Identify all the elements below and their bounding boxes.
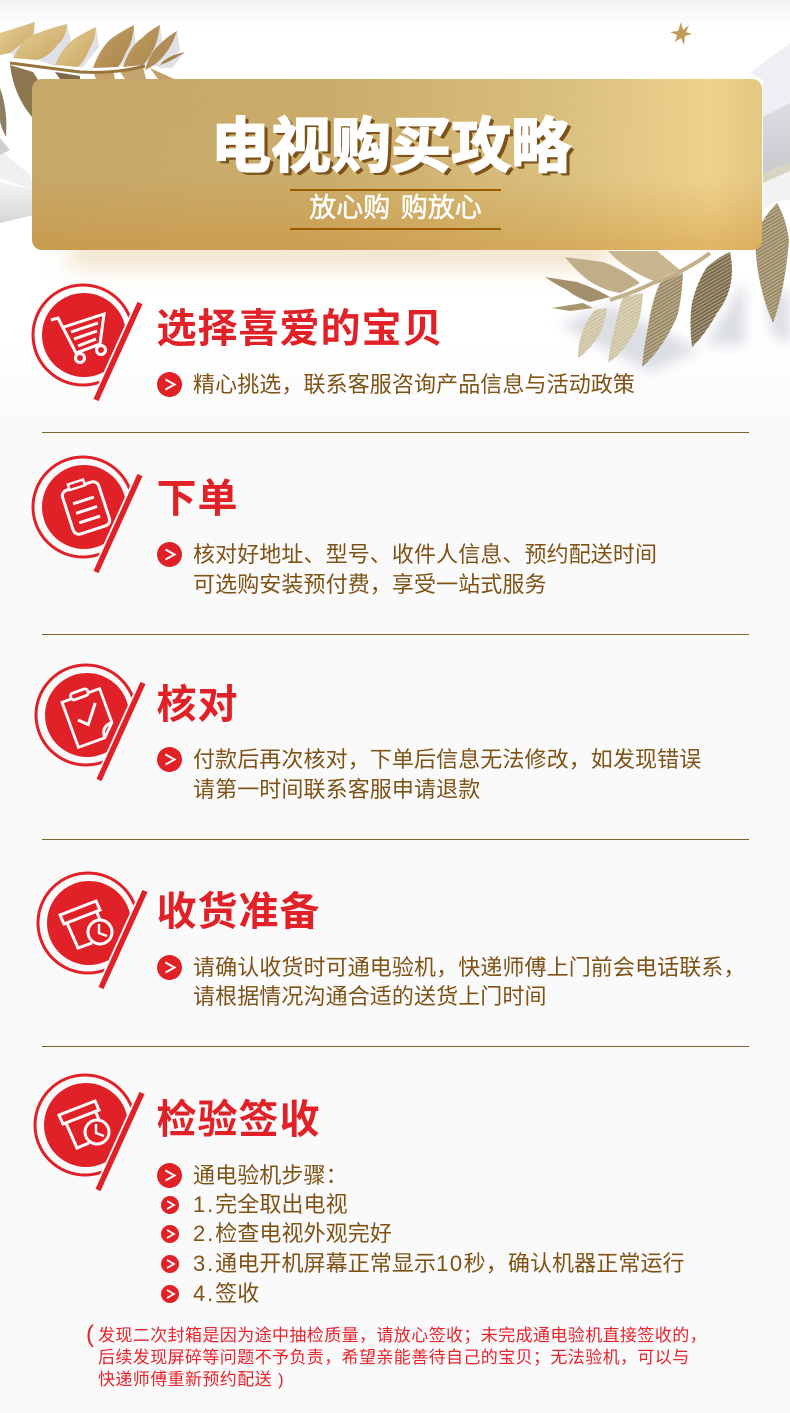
small bullet 2: [161, 1225, 179, 1243]
soft leaf shadows: [560, 280, 790, 372]
list item 4: 4.签收: [193, 1281, 259, 1306]
description: 付款后再次核对，下单后信息无法修改，如发现错误: [193, 747, 701, 772]
description line 2: 请根据情况沟通合适的送货上门时间: [193, 984, 547, 1009]
icon: box with clock: [34, 1074, 144, 1192]
description: 精心挑选，联系客服咨询产品信息与活动政策: [193, 372, 635, 397]
icon: box with clock: [36, 872, 148, 990]
gold star: [670, 22, 692, 45]
note line 3: 快递师傅重新预约配送 ): [98, 1370, 284, 1389]
gold leaves, top-left: [0, 22, 35, 55]
list item 1: 1.完全取出电视: [193, 1192, 348, 1217]
step 2: order: [32, 456, 657, 597]
list item 2: 2.检查电视外观完好: [193, 1221, 392, 1246]
header banner: [32, 79, 762, 250]
bullet: [157, 542, 182, 567]
step 1: choose: [32, 284, 635, 402]
note: [86, 1321, 707, 1389]
title: 电视购买攻略: [211, 113, 571, 180]
under-stem leaves, left: [10, 65, 38, 117]
banner grain: [32, 79, 762, 250]
subtitle with rules: [290, 189, 501, 230]
bullet: [157, 955, 182, 980]
note line 1: 发现二次封箱是因为途中抽检质量，请放心签收；未完成通电验机直接签收的，: [98, 1326, 707, 1345]
heading: 核对: [156, 683, 238, 727]
bullet: [157, 1163, 182, 1188]
icon: shopping cart: [32, 284, 142, 402]
opening parenthesis: (: [86, 1321, 94, 1348]
paper shapes, left: [0, 150, 34, 190]
heading: 选择喜爱的宝贝: [156, 307, 444, 351]
right leaf cluster: [608, 251, 680, 281]
warm glow under panel: [70, 240, 610, 266]
list item 3: 3.通电开机屏幕正常显示10秒，确认机器正常运行: [193, 1251, 685, 1276]
subtitle with rules: 放心购 购放心: [309, 193, 482, 223]
step 4: prepare for delivery: [36, 872, 746, 1009]
heading: 下单: [156, 477, 238, 521]
heading: 收货准备: [156, 890, 320, 934]
description: 核对好地址、型号、收件人信息、预约配送时间: [193, 542, 657, 567]
description line 2: 请第一时间联系客服申请退款: [193, 777, 480, 802]
paper shapes, right: [750, 43, 790, 117]
leaf shadows, left: [8, 22, 185, 68]
small bullet 1: [161, 1196, 179, 1214]
icon: clipboard check: [34, 664, 146, 782]
note line 2: 后续发现屏碎等问题不予负责，希望亲能善待自己的宝贝；无法验机，可以与: [98, 1348, 690, 1367]
description line 2: 可选购安装预付费，享受一站式服务: [193, 572, 547, 597]
icon: clipboard list: [32, 456, 142, 574]
heading: 检验签收: [156, 1098, 320, 1142]
small bullet 3: [161, 1255, 179, 1273]
decorative backdrop: paper leaves and star: [0, 22, 790, 374]
small bullet 4: [161, 1285, 179, 1303]
description: 通电验机步骤：: [193, 1163, 348, 1188]
bullet: [157, 747, 182, 772]
description: 请确认收货时可通电验机，快递师傅上门前会电话联系，: [193, 955, 746, 980]
bullet: [157, 372, 182, 397]
step 3: verify: [34, 664, 701, 802]
step 5: inspect and sign: [34, 1074, 685, 1306]
